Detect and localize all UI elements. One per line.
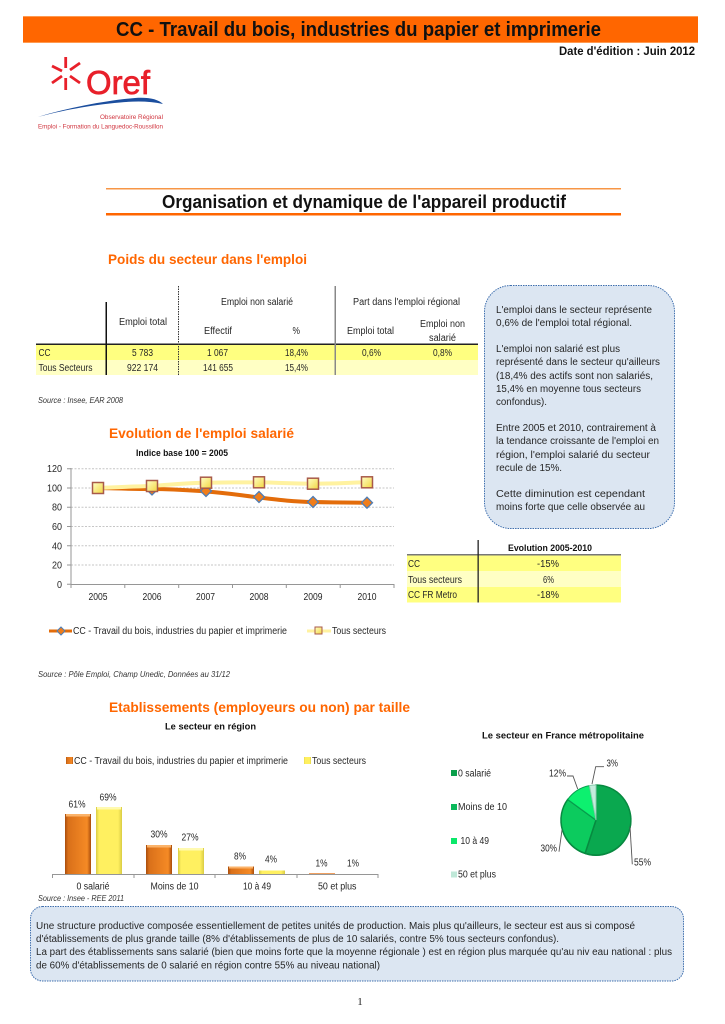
heading: evolution: Evolution de l'emploi salarié	[109, 425, 294, 441]
pie chart: France: 55%	[634, 858, 651, 868]
line chart: evolution of salaried employment: 2005	[88, 592, 108, 603]
chart legend: pie: 10 à 49	[460, 836, 489, 847]
callout: establishment structure	[30, 906, 684, 981]
callout: commentary on employment: L'emploi dans le secteur représente	[496, 305, 652, 316]
callout: establishment structure: La part des établissements sans salarié (bien que moins forte que la moyenne régionale ) est en région plus marquée qu'au niv eau national : plus	[36, 947, 672, 958]
callout: commentary on employment: la tendance croissante de l'emploi en	[496, 436, 659, 447]
bar chart: establishments by size: 50 et plus	[318, 882, 356, 892]
bar chart: establishments by size: 1%	[316, 858, 328, 870]
table: evolution 2005-2010: CC FR Metro	[408, 590, 457, 601]
table: evolution 2005-2010	[407, 540, 621, 602]
line chart: evolution of salaried employment: 120	[47, 464, 62, 475]
callout: commentary on employment: Entre 2005 et 2010, contrairement à	[496, 423, 656, 434]
line chart: evolution of salaried employment: 0	[57, 580, 62, 591]
bar chart: establishments by size: 10 à 49	[243, 882, 271, 892]
bar chart: establishments by size: 69%	[100, 792, 117, 804]
table: poids du secteur: Emploi non salarié	[221, 297, 293, 308]
source: bar chart: Source : Insee - REE 2011	[38, 893, 124, 903]
chart subtitle: region: Le secteur en région	[165, 722, 256, 732]
line chart: evolution of salaried employment: 2008	[250, 592, 269, 603]
bar chart: establishments by size: 8%	[234, 852, 246, 862]
table: poids du secteur: Emploi total	[119, 317, 167, 328]
table: poids du secteur: 1 067	[207, 348, 228, 359]
line chart: evolution of salaried employment: 80	[52, 503, 62, 514]
callout: commentary on employment: (18,4% des actifs sont non salariés,	[496, 371, 653, 382]
table: poids du secteur	[36, 286, 478, 375]
source: line chart: Source : Pôle Emploi, Champ Unedic, Données au 31/12	[38, 669, 230, 679]
table: poids du secteur: Tous Secteurs	[38, 363, 92, 374]
chart legend: pie: 50 et plus	[458, 870, 496, 880]
chart legend: line chart: CC - Travail du bois, industries du papier et imprimerie	[73, 626, 287, 637]
table: poids du secteur: %	[292, 326, 300, 337]
callout: commentary on employment: moins forte que celle observée au	[496, 502, 645, 513]
pie chart: France: 3%	[606, 758, 618, 770]
table: poids du secteur: 0,6%	[362, 348, 381, 359]
table: evolution 2005-2010: CC	[408, 559, 420, 570]
bar chart: establishments by size	[52, 792, 378, 892]
line chart: evolution of salaried employment: 60	[52, 522, 62, 533]
bar chart: establishments by size: 30%	[150, 830, 168, 840]
line chart: evolution of salaried employment: 2007	[196, 592, 215, 603]
logo: Oref: Emploi - Formation du Languedoc-Roussillon	[38, 124, 163, 130]
table: poids du secteur: CC	[38, 348, 50, 359]
callout: commentary on employment: 15,4% en moyenne tous secteurs	[496, 384, 641, 395]
callout: commentary on employment: région, l'emploi salarié du secteur	[496, 450, 651, 461]
chart legend: bar chart: Tous secteurs	[312, 756, 366, 767]
chart legend: pie	[451, 768, 507, 880]
line chart: evolution of salaried employment: 2006	[142, 592, 162, 603]
bar chart: establishments by size: 4%	[265, 854, 277, 866]
bar chart: establishments by size: 61%	[68, 800, 86, 810]
line chart: evolution of salaried employment	[47, 464, 394, 603]
logo: Oref: Oref	[86, 64, 151, 101]
table: poids du secteur: 0,8%	[433, 348, 452, 359]
logo: Oref	[38, 57, 164, 130]
chart legend: line chart: Tous secteurs	[332, 626, 386, 637]
bar chart: establishments by size: 0 salarié	[76, 882, 110, 892]
heading: poids du secteur: Poids du secteur dans l'emploi	[108, 251, 307, 267]
chart subtitle: France: Le secteur en France métropolitaine	[482, 730, 644, 742]
chart legend: pie: Moins de 10	[458, 802, 507, 813]
table: poids du secteur: 18,4%	[285, 348, 308, 359]
chart subtitle: Indice base 100 = 2005	[136, 448, 229, 459]
callout: establishment structure: Une structure productive composée essentiellement de petites unités de production. Mais plus qu'ailleurs, le secteur est aus si composé	[36, 921, 635, 932]
callout: commentary on employment: L'emploi non salarié est plus	[496, 344, 620, 355]
callout: commentary on employment	[484, 286, 674, 528]
heading: etablissements: Etablissements (employeurs ou non) par taille	[109, 699, 410, 715]
callout: establishment structure: de 60% d'établissements de 0 salarié en région contre 55% au niveau national)	[36, 960, 380, 972]
bar chart: establishments by size: Moins de 10	[150, 882, 199, 892]
section heading: Organisation et dynamique de l'appareil productif	[162, 192, 567, 212]
table: poids du secteur: 141 655	[203, 363, 233, 374]
edition date: Date d'édition : Juin 2012	[559, 46, 695, 58]
source: table: Source : Insee, EAR 2008	[38, 395, 123, 405]
line chart: evolution of salaried employment: 20	[52, 560, 62, 572]
table: poids du secteur: Emploi non	[420, 319, 465, 330]
table: poids du secteur: 5 783	[132, 348, 153, 359]
table: poids du secteur: Effectif	[204, 326, 232, 337]
line chart: evolution of salaried employment: 40	[52, 541, 62, 552]
table: evolution 2005-2010: -15%	[537, 559, 559, 570]
logo: Oref: Observatoire Régional	[100, 114, 164, 121]
chart legend: pie: 0 salarié	[458, 768, 491, 780]
callout: establishment structure: d'établissements de plus grande taille (8% d'établissements de plus de 10 salariés, contre 5% tous secteurs confondus).	[36, 934, 559, 945]
line chart: evolution of salaried employment: 2010	[358, 592, 377, 603]
line chart: evolution of salaried employment: 100	[47, 484, 62, 494]
table: poids du secteur: Emploi total	[347, 326, 394, 337]
table: poids du secteur: salarié	[429, 333, 456, 344]
page number: 1	[357, 996, 363, 1008]
callout: commentary on employment: confondus).	[496, 397, 547, 408]
pie chart: France: 30%	[540, 844, 557, 854]
callout: commentary on employment: recule de 15%.	[496, 463, 562, 474]
table: evolution 2005-2010: Evolution 2005-2010	[508, 543, 592, 554]
pie chart: France	[540, 758, 651, 868]
chart legend: bar chart: CC - Travail du bois, industries du papier et imprimerie	[74, 756, 288, 767]
line chart: evolution of salaried employment: 2009	[304, 592, 323, 603]
title banner	[23, 16, 698, 43]
title banner: CC - Travail du bois, industries du papier et imprimerie	[116, 19, 601, 41]
callout: commentary on employment: Cette diminution est cependant	[496, 489, 645, 500]
callout: commentary on employment: représenté dans le secteur qu'ailleurs	[496, 357, 660, 368]
table: poids du secteur: 15,4%	[285, 363, 308, 374]
callout: commentary on employment: 0,6% de l'emploi total régional.	[496, 318, 632, 329]
table: evolution 2005-2010: Tous secteurs	[408, 575, 462, 586]
table: evolution 2005-2010: -18%	[537, 590, 559, 601]
bar chart: establishments by size: 27%	[182, 832, 199, 844]
table: poids du secteur: 922 174	[127, 363, 158, 374]
bar chart: establishments by size: 1%	[347, 858, 359, 870]
table: evolution 2005-2010: 6%	[543, 575, 554, 586]
table: poids du secteur: Part dans l'emploi régional	[353, 297, 460, 308]
pie chart: France: 12%	[549, 768, 566, 780]
